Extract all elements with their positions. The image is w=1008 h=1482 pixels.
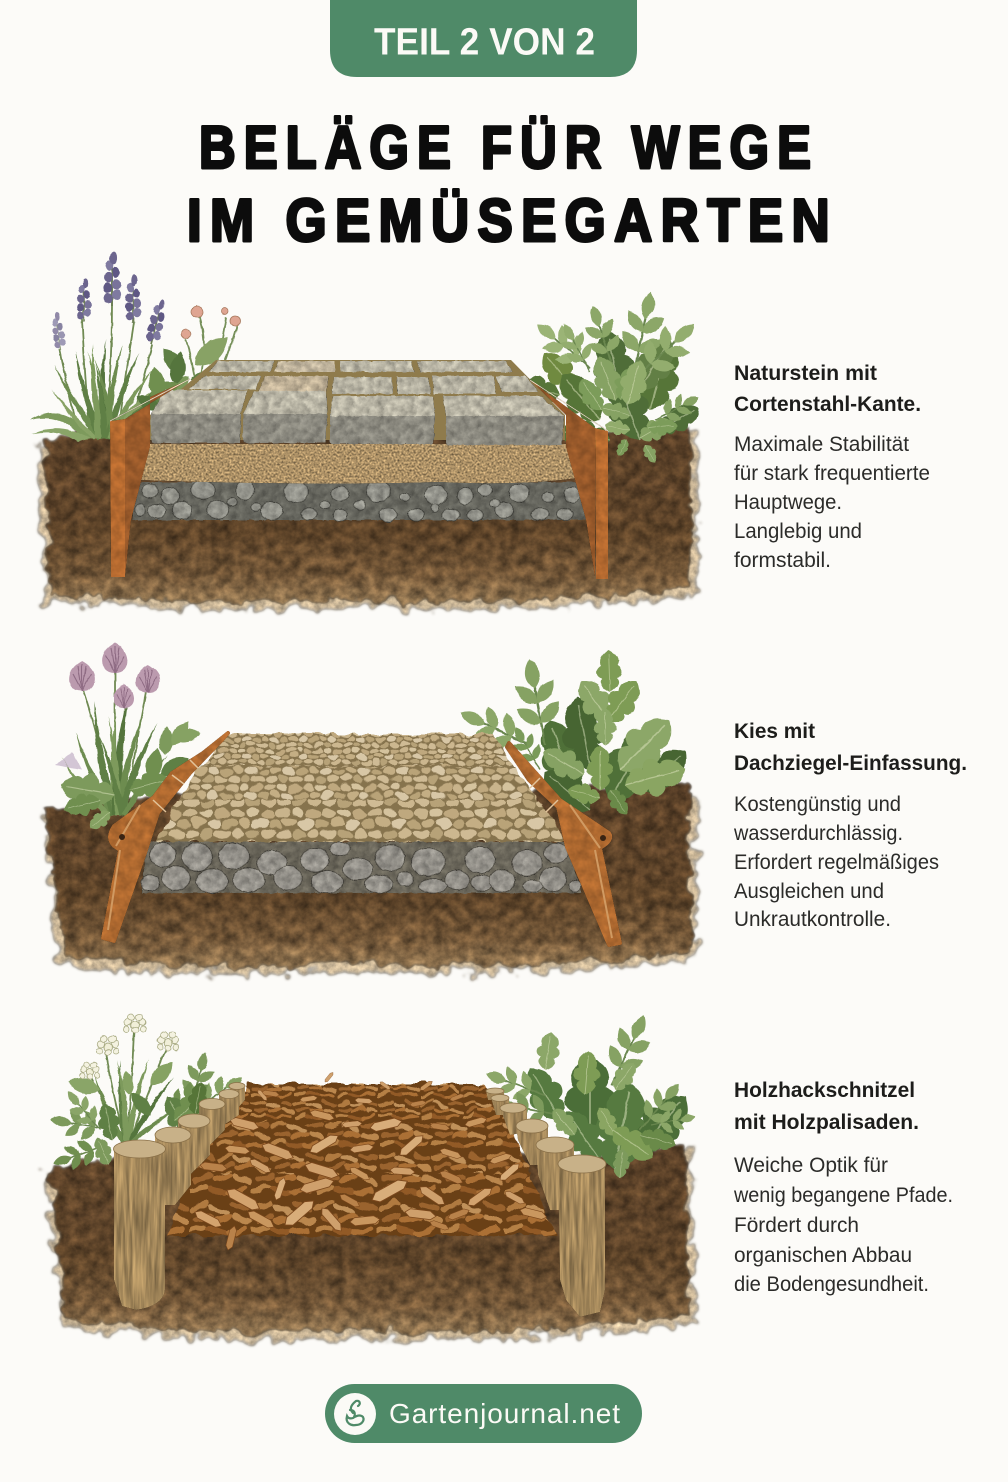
description: organischen Abbau (734, 1244, 912, 1267)
heading: Dachziegel-Einfassung. (734, 751, 967, 775)
heading: Cortenstahl-Kante. (734, 392, 921, 416)
plants left: lavender and pink flowers (30, 251, 240, 443)
text block: gravel (733, 719, 967, 931)
heading (734, 719, 967, 775)
paving stones (150, 360, 565, 445)
heading: mit Holzpalisaden. (734, 1110, 919, 1134)
large wood chips (193, 1071, 548, 1251)
plants left: white flowers (48, 1014, 252, 1179)
roof-tile edging right (507, 743, 620, 945)
description: wasserdurchlässig. (733, 822, 903, 845)
heading: Kies mit (734, 719, 815, 743)
panel: natural stone path illustration (30, 251, 710, 610)
description: Langlebig und (734, 520, 862, 543)
wood chip surface (168, 1071, 556, 1251)
footer badge: Gartenjournal.net (325, 1384, 642, 1443)
tan pebble surface (155, 734, 566, 842)
footer badge: Gartenjournal.net: Gartenjournal.net (389, 1398, 620, 1429)
soil cross-section (44, 1144, 696, 1340)
coarse stone layer (141, 842, 582, 893)
description: Kostengünstig und (734, 793, 901, 816)
description: für stark frequentierte (734, 462, 930, 485)
wooden palisades left (114, 1082, 245, 1310)
title: BELÄGE FÜR WEGE (199, 114, 819, 181)
description: Maximale Stabilität (734, 433, 909, 456)
badge: part 2 of 2 (330, 0, 637, 77)
cortensteel edging left and right (110, 379, 608, 579)
plants right: herb bush (506, 287, 710, 466)
wooden palisades right (486, 1088, 606, 1317)
description: die Bodengesundheit. (734, 1273, 929, 1296)
heading: Naturstein mit (734, 361, 877, 385)
description (733, 793, 939, 931)
plants left: chives (54, 643, 205, 835)
plants right: leafy bush (451, 649, 697, 824)
description: Fördert durch (734, 1214, 859, 1237)
panel: gravel path illustration (44, 643, 698, 975)
soil cross-section (44, 782, 698, 975)
soil cross-section (38, 426, 698, 610)
description: Hauptwege. (734, 491, 842, 514)
heading (734, 361, 921, 416)
description: Erfordert regelmäßiges (734, 851, 939, 874)
roof-tile edging left (103, 733, 228, 941)
icon: garden logo (334, 1393, 376, 1435)
panel: wood chip path illustration (44, 1006, 701, 1340)
badge: part 2 of 2: TEIL 2 VON 2 (374, 22, 595, 64)
plants right: leafy bush (480, 1006, 701, 1179)
description: Unkrautkontrolle. (734, 908, 891, 931)
sand bedding layer (140, 444, 577, 484)
heading (734, 1078, 919, 1134)
description: formstabil. (734, 549, 831, 572)
title: IM GEMÜSEGARTEN (187, 187, 838, 254)
title (187, 114, 838, 254)
gravel base layer (132, 480, 592, 522)
description (733, 1154, 953, 1296)
description: Ausgleichen und (734, 880, 884, 903)
heading: Holzhackschnitzel (734, 1078, 915, 1102)
description: wenig begangene Pfade. (733, 1184, 953, 1207)
text block: natural stone (734, 361, 930, 572)
text block: wood chips (733, 1078, 953, 1296)
description (734, 433, 930, 572)
description: Weiche Optik für (734, 1154, 888, 1177)
